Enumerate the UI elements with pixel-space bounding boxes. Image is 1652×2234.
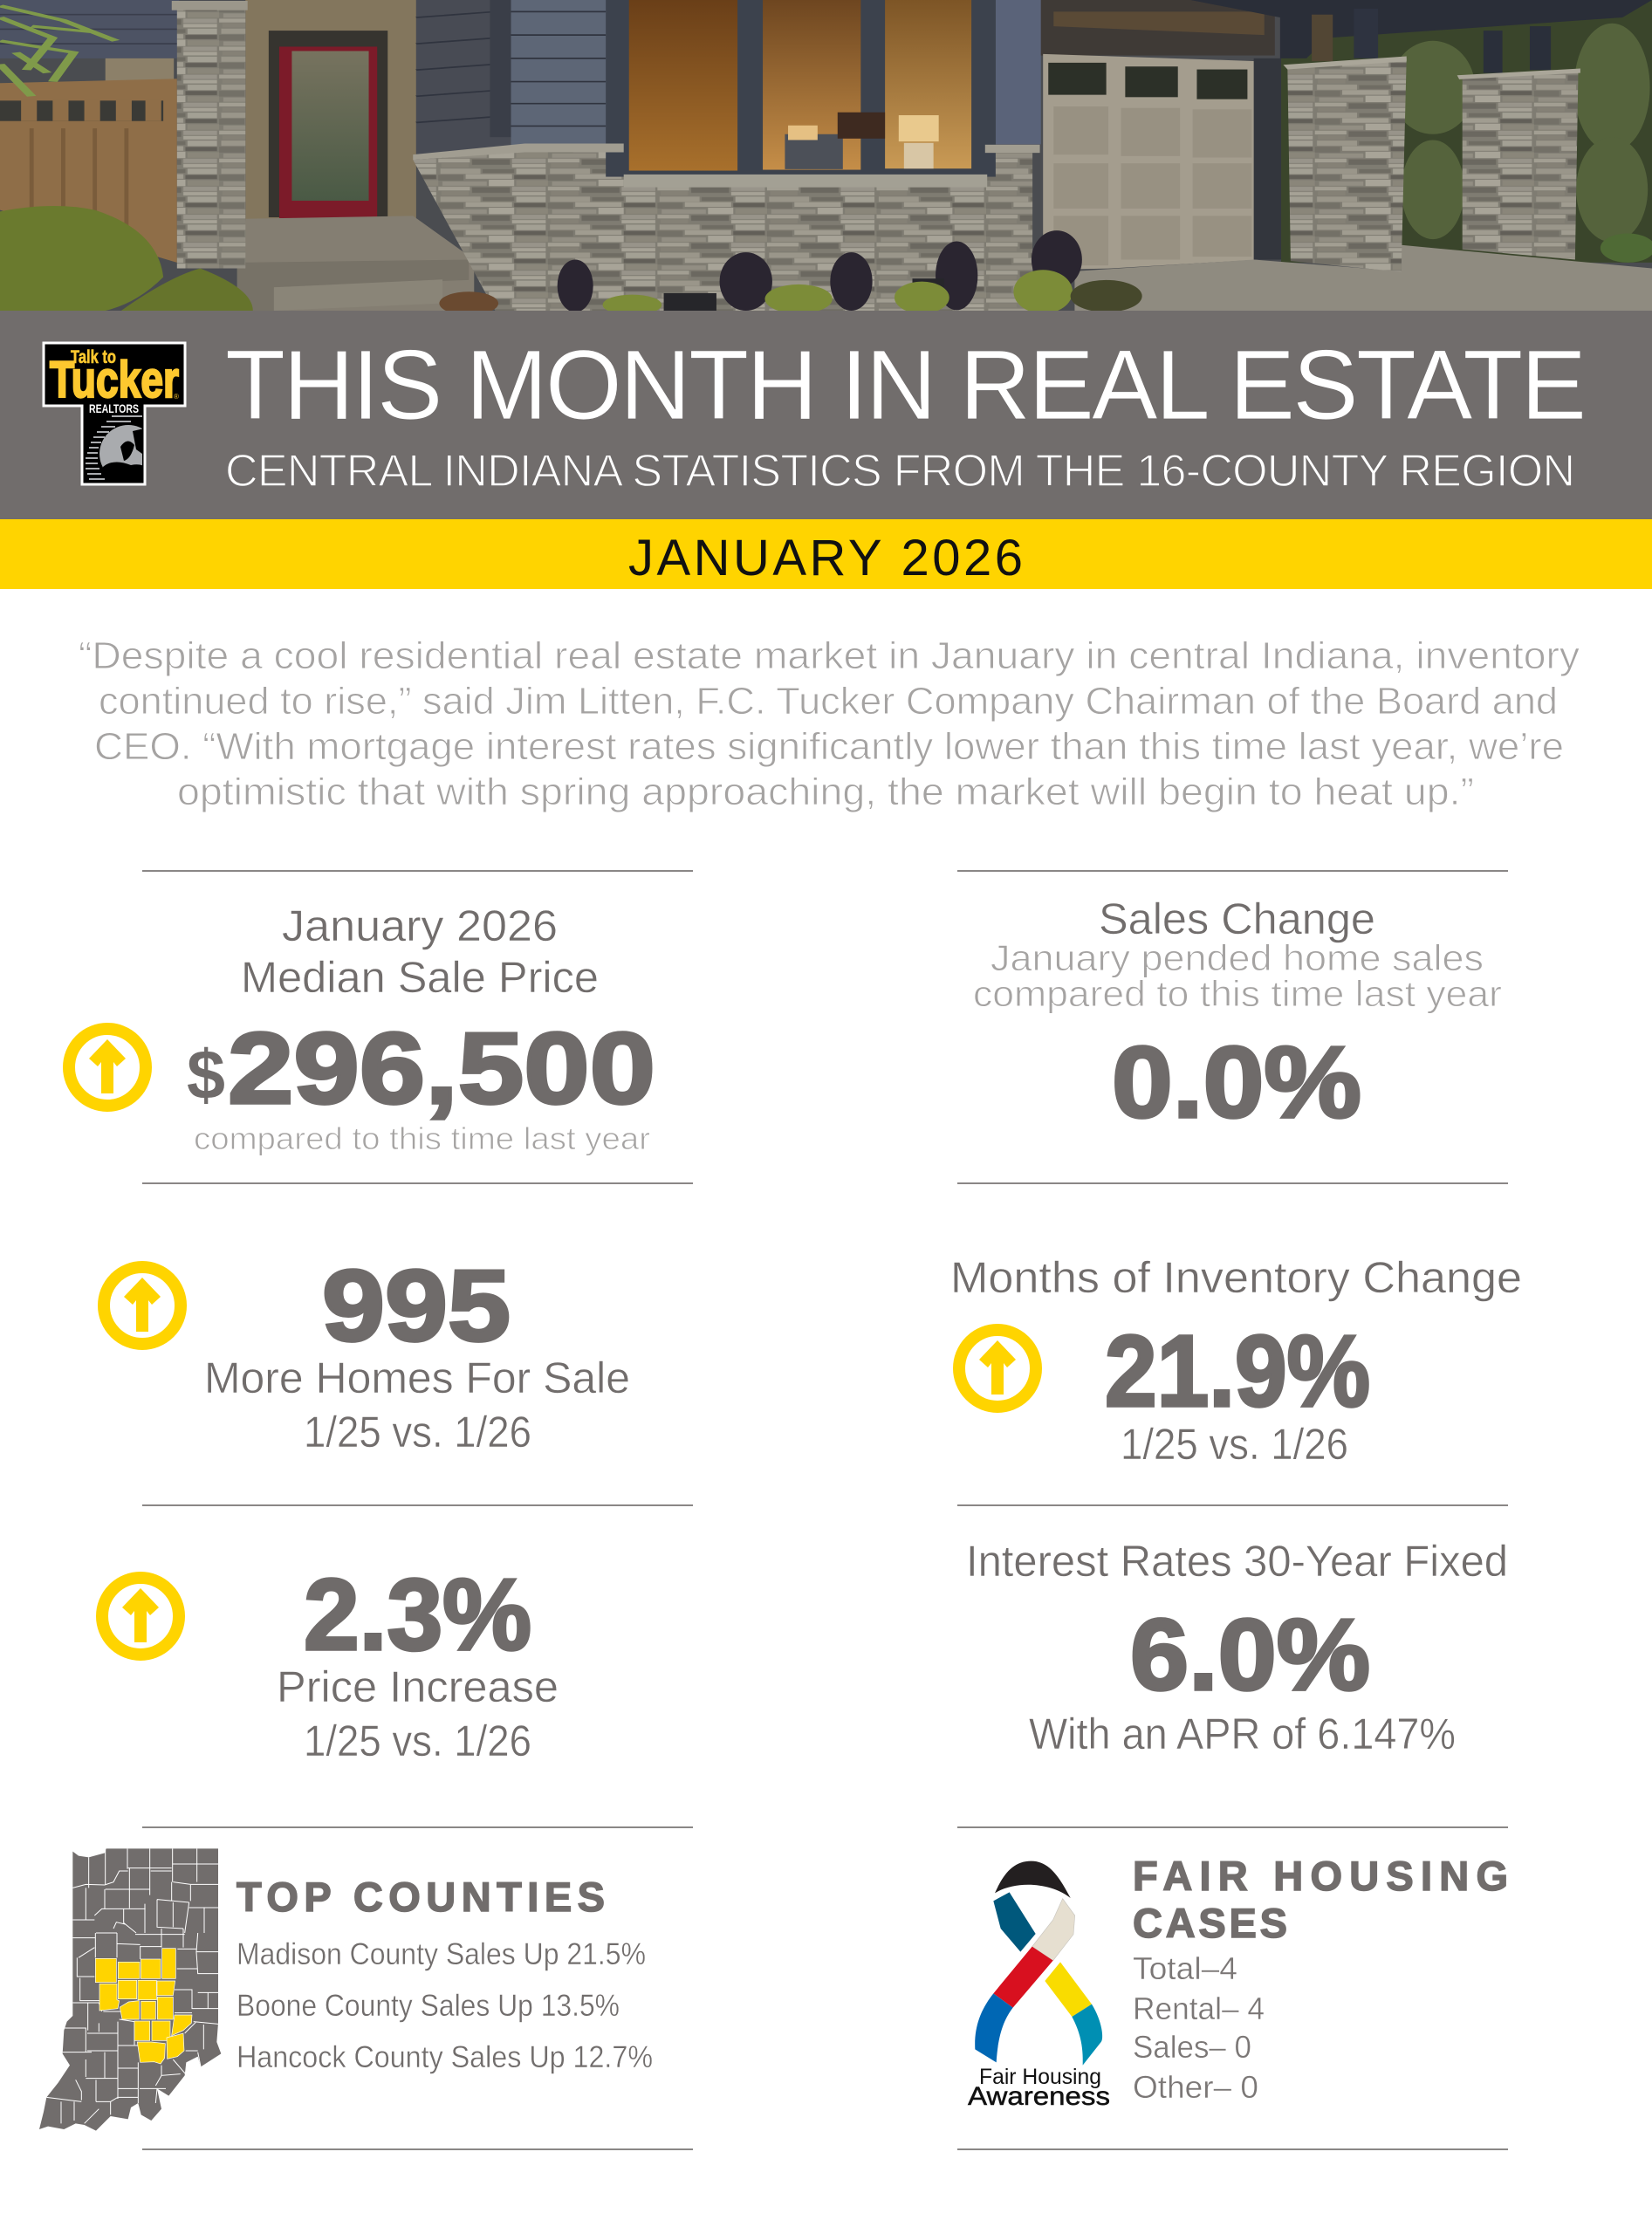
panel: price increase: Price Increase: [277, 1662, 559, 1711]
yellow date band: [0, 519, 1652, 589]
panel: fair housing cases: Other– 0: [1133, 2069, 1258, 2105]
logo: Talk to Tucker Realtors: REALTORS: [89, 401, 139, 415]
panel: sales change: Sales Change: [1099, 894, 1375, 943]
quote: CEO. “With mortgage interest rates significantly lower than this time last year, we’re: [94, 725, 1564, 768]
panel: top counties: TOP COUNTIES: [236, 1874, 605, 1920]
panel: sales change: 0.0%: [1112, 1025, 1361, 1139]
panel: fair housing cases: CASES: [1133, 1900, 1287, 1946]
quote: optimistic that with spring approaching, the market will begin to heat up.”: [177, 771, 1474, 813]
panel: fair housing cases: [968, 1853, 1508, 2111]
header photo: house exterior: [0, 0, 1652, 311]
panel: interest rates: 6.0%: [1130, 1598, 1370, 1711]
grey title banner: [0, 311, 1652, 519]
date heading: JANUARY 2026: [628, 530, 1023, 586]
logo: Talk to Tucker Realtors: Talk to: [71, 347, 116, 367]
panel: top counties: Hancock County Sales Up 12.7%: [236, 2040, 653, 2074]
panel: fair housing cases: Rental– 4: [1133, 1991, 1265, 2026]
panel: median sale price: 296,500: [228, 1011, 655, 1125]
panel: more homes for sale: [104, 1249, 630, 1456]
panel: median sale price: [69, 901, 655, 1156]
panel: interest rates: [966, 1537, 1508, 1758]
icon: fair housing ribbon: Fair Housing: [979, 2065, 1101, 2089]
icon: up arrow: [959, 1330, 1036, 1407]
panel: more homes for sale: 1/25 vs. 1/26: [304, 1408, 531, 1456]
panel: months of inventory change: [950, 1253, 1522, 1469]
panel: price increase: [102, 1558, 559, 1765]
icon: fair housing ribbon: [968, 1861, 1110, 2111]
quote: [79, 634, 1580, 813]
panel: interest rates: Interest Rates 30-Year Fixed: [966, 1537, 1508, 1586]
logo: Talk to Tucker Realtors: Tucker: [50, 352, 179, 408]
panel: months of inventory change: 21.9%: [1105, 1314, 1370, 1428]
panel: sales change: [973, 894, 1502, 1139]
icon: fair housing ribbon: Awareness: [968, 2082, 1110, 2111]
icon: up arrow: [69, 1029, 146, 1106]
panel: price increase: 2.3%: [304, 1558, 531, 1671]
panel: fair housing cases: Sales– 0: [1133, 2029, 1251, 2065]
logo: Talk to Tucker Realtors: ®: [174, 393, 179, 401]
panel: interest rates: With an APR of 6.147%: [1029, 1710, 1456, 1758]
panel: median sale price: January 2026: [282, 901, 558, 950]
panel: months of inventory change: Months of Inventory Change: [950, 1253, 1522, 1302]
panel: more homes for sale: More Homes For Sale: [204, 1353, 630, 1402]
panel: price increase: 1/25 vs. 1/26: [304, 1717, 531, 1765]
panel: sales change: January pended home sales: [991, 937, 1484, 978]
panel: top counties: [39, 1848, 653, 2131]
panel: more homes for sale: 995: [322, 1249, 511, 1362]
map: Indiana counties: [39, 1848, 222, 2131]
panel: median sale price: $: [187, 1036, 225, 1114]
panel: median sale price: Median Sale Price: [241, 953, 599, 1002]
icon: up arrow: [104, 1267, 181, 1344]
quote: continued to rise,” said Jim Litten, F.C. Tucker Company Chairman of the Board and: [99, 680, 1558, 723]
panel: months of inventory change: 1/25 vs. 1/26: [1121, 1420, 1348, 1469]
panel: median sale price: compared to this time last year: [194, 1120, 650, 1156]
subtitle: CENTRAL INDIANA STATISTICS FROM THE 16-COUNTY REGION: [225, 446, 1575, 497]
panel: fair housing cases: Total–4: [1133, 1950, 1237, 1986]
panel: sales change: compared to this time last year: [973, 973, 1502, 1014]
panel: top counties: Madison County Sales Up 21.5%: [236, 1937, 646, 1971]
icon: up arrow: [102, 1578, 179, 1655]
logo: Talk to Tucker Realtors: [44, 343, 185, 489]
title: THIS MONTH IN REAL ESTATE: [225, 330, 1587, 440]
panel: fair housing cases: FAIR HOUSING: [1133, 1853, 1508, 1899]
quote: “Despite a cool residential real estate market in January in central Indiana, inventory: [79, 634, 1580, 677]
panel: top counties: Boone County Sales Up 13.5%: [236, 1989, 620, 2023]
